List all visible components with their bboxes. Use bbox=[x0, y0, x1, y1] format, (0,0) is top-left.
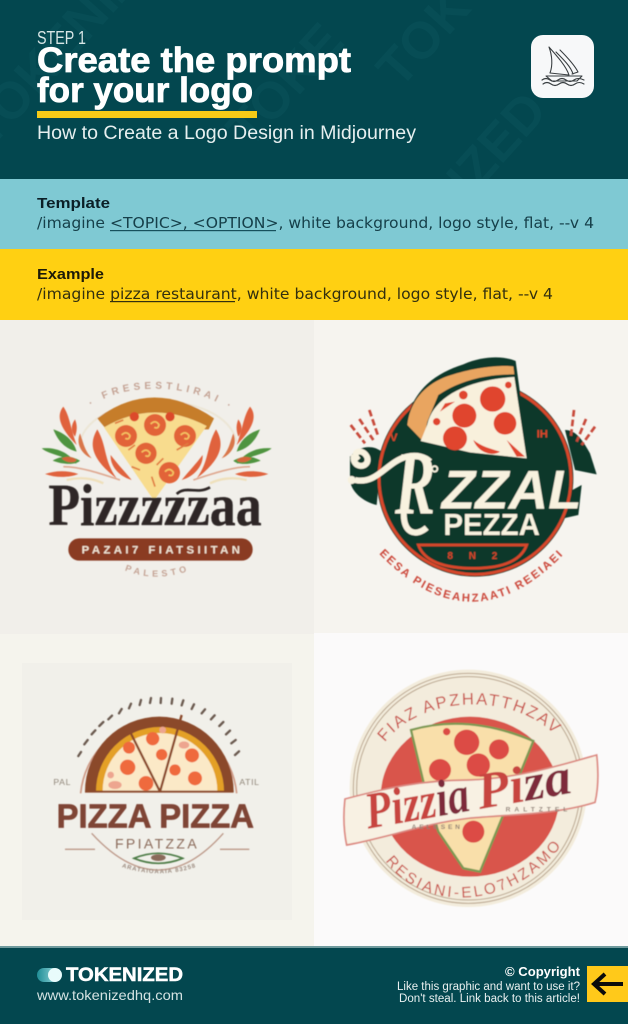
script wordmark: ° bbox=[430, 461, 439, 487]
ribbon wordmark: Pizzia bbox=[360, 766, 474, 841]
ribbon wordmark: Piza bbox=[471, 748, 575, 821]
ribbon bbox=[344, 748, 598, 845]
tagline: FPIATZZA bbox=[115, 835, 197, 851]
dark badge circle: IH bbox=[537, 429, 548, 441]
side labels: PAL bbox=[53, 777, 71, 787]
half pizza bbox=[81, 715, 237, 793]
leaves left bbox=[42, 407, 132, 483]
logo 4: pizzia piza badge: RESIANI-ELO7HZAMO bbox=[386, 841, 560, 898]
logo 4: pizzia piza badge bbox=[342, 670, 600, 908]
copyright: Don't steal. Link back to this article! bbox=[399, 993, 580, 1005]
logo 2: pezza badge bbox=[348, 356, 598, 602]
ribbon wordmark bbox=[360, 748, 575, 841]
website: www.tokenizedhq.com bbox=[36, 987, 183, 1003]
dark badge circle bbox=[377, 380, 573, 577]
wordmark: Pizzzzzaa bbox=[48, 472, 262, 538]
brand name: TOKENIZED bbox=[66, 965, 183, 986]
header panel: IZED bbox=[436, 81, 558, 208]
ribbon: AELUSEN bbox=[412, 824, 460, 831]
logo 1: pizzzzzaa bbox=[42, 381, 272, 578]
copyright: Like this graphic and want to use it? bbox=[397, 981, 580, 993]
leaves right bbox=[182, 407, 272, 483]
template label: Template bbox=[37, 195, 110, 212]
arrow box bbox=[587, 966, 628, 1002]
subtitle: How to Create a Logo Design in Midjourney bbox=[37, 123, 417, 144]
script wordmark: R bbox=[394, 434, 435, 533]
example prompt: /imagine pizza restaurant, white background, logo style, flat, --v 4 bbox=[37, 285, 553, 303]
bottom arc ornament bbox=[65, 833, 249, 870]
dark side flares bbox=[350, 430, 597, 518]
ribbon: RALTZTEL bbox=[506, 807, 567, 814]
template prompt: /imagine <TOPIC>, <OPTION>, white background, logo style, flat, --v 4 bbox=[37, 214, 594, 232]
dark badge circle: V bbox=[390, 432, 398, 444]
wordmark: PIZZA PIZZA bbox=[57, 799, 254, 836]
banner bbox=[68, 538, 253, 561]
script wordmark: ZZAL bbox=[440, 458, 582, 520]
icon: midjourney sailboat bbox=[531, 35, 594, 98]
script wordmark bbox=[348, 434, 582, 542]
template band bbox=[0, 179, 628, 249]
pizza slice bbox=[411, 724, 533, 872]
subtitle pezza: PEZZA bbox=[443, 508, 540, 542]
side forks bbox=[351, 410, 595, 445]
arc lettering: FIAZ APZHATTHZAV bbox=[376, 692, 562, 742]
cream roundel bbox=[350, 670, 587, 907]
banner: PAZAI7 FIATSIITAN bbox=[82, 544, 240, 556]
logo 3: pizza pizza bbox=[53, 696, 260, 874]
lower arc lettering: PALESTO bbox=[124, 564, 186, 578]
example label: Example bbox=[37, 266, 104, 283]
rays bbox=[78, 698, 239, 756]
pizza slice bbox=[404, 357, 529, 461]
step label: STEP 1 bbox=[37, 28, 86, 48]
arc lettering: · FRESESTLIRAI · bbox=[89, 381, 230, 406]
small lettering: ARATAIOAAIA 83258 bbox=[122, 863, 196, 874]
copyright: © Copyright bbox=[505, 964, 581, 979]
side labels: ATIL bbox=[239, 777, 260, 787]
header panel: TOKE bbox=[216, 13, 355, 158]
side labels bbox=[53, 777, 260, 787]
pizza slice bbox=[97, 397, 214, 501]
title underline bbox=[37, 111, 257, 118]
dark badge circle: 8 N 2 bbox=[447, 551, 498, 562]
panel: logo backgrounds bbox=[0, 320, 628, 947]
header panel bbox=[0, 0, 628, 208]
title bbox=[37, 41, 351, 110]
title: Create the prompt bbox=[37, 41, 351, 80]
footer panel bbox=[0, 946, 628, 1024]
copyright bbox=[397, 964, 581, 1005]
example band bbox=[0, 249, 628, 320]
title: for your logo bbox=[37, 71, 253, 110]
tokenized logo mark bbox=[37, 968, 62, 982]
arc lettering: EESA PIESEAHZAATI REEIAEI bbox=[379, 548, 563, 602]
